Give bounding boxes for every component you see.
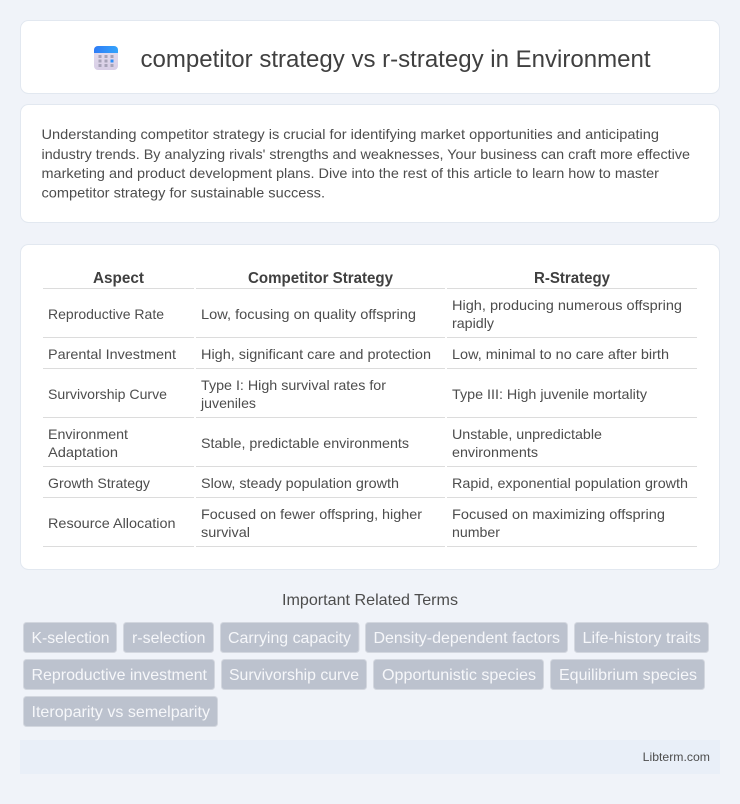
table row: growth strategy: Rapid, exponential population growth (452, 475, 688, 491)
tag: Life-history traits: Life-history traits (582, 630, 701, 647)
table row: environment adaptation: Adaptation (48, 444, 118, 460)
icon: calendar (94, 46, 118, 70)
text block: introduction: marketing and product development plans. Dive into the rest of this article to learn how to master (42, 165, 659, 181)
table row: resource allocation: number (452, 524, 500, 540)
title: competitor strategy vs r-strategy in Environment (140, 46, 651, 73)
panel: related term tags (24, 622, 708, 726)
table row: parental investment (43, 346, 697, 369)
tag: K-selection: K-selection (32, 630, 110, 647)
panel: header (20, 20, 720, 94)
panel: introduction (20, 104, 720, 222)
table row: growth strategy: Growth Strategy (48, 475, 150, 491)
table row: growth strategy (43, 475, 697, 498)
table row: growth strategy: Slow, steady population growth (201, 475, 399, 491)
table row: survivorship curve (43, 377, 697, 418)
table row: resource allocation: survival (201, 524, 250, 540)
table header row (43, 270, 697, 289)
text block: introduction: competitor strategy for sustainable success. (42, 184, 325, 200)
tag: Opportunistic species: Opportunistic species (382, 667, 536, 684)
table row: environment adaptation: Unstable, unpredictable (452, 426, 602, 442)
table row: resource allocation (43, 506, 697, 547)
text block: introduction: industry trends. By analyzing rivals' strengths and weaknesses, Your business can craft more effective (42, 146, 690, 162)
table row: reproductive rate: High, producing numerous offspring (452, 297, 682, 313)
table header row: Competitor Strategy (248, 270, 393, 287)
tag: Reproductive investment (24, 660, 214, 690)
table row: environment adaptation: Stable, predictable environments (201, 435, 409, 451)
table row: reproductive rate: rapidly (452, 315, 494, 331)
tag: Equilibrium species (550, 660, 704, 690)
table row: resource allocation: Resource Allocation (48, 515, 176, 531)
tag: Life-history traits (574, 622, 708, 652)
table header row: R-Strategy (534, 270, 610, 287)
text block: introduction (42, 126, 690, 200)
tag: Survivorship curve (222, 660, 366, 690)
table row: resource allocation: Focused on maximizing offspring (452, 506, 665, 522)
table header row: Aspect (93, 270, 145, 287)
panel: comparison table (20, 244, 720, 570)
footer: Libterm.com (643, 750, 710, 764)
tag: Opportunistic species (374, 660, 544, 690)
tag: K-selection (24, 622, 116, 652)
footer (20, 740, 720, 774)
table row: reproductive rate (43, 297, 697, 338)
table row: survivorship curve: Type III: High juvenile mortality (452, 386, 647, 402)
table row: resource allocation: Focused on fewer offspring, higher (201, 506, 422, 522)
tag: Density-dependent factors (366, 622, 568, 652)
tag: Equilibrium species: Equilibrium species (559, 667, 697, 684)
table row: survivorship curve: Survivorship Curve (48, 386, 167, 402)
tag: Carrying capacity: Carrying capacity (228, 630, 351, 647)
heading: important related terms: Important Related Terms (282, 592, 458, 609)
table row: environment adaptation (43, 426, 697, 467)
table row: parental investment: Parental Investment (48, 346, 176, 362)
tag: Survivorship curve: Survivorship curve (229, 667, 359, 684)
table row: survivorship curve: juveniles (200, 395, 256, 411)
table row: environment adaptation: Environment (48, 426, 128, 442)
tag: Carrying capacity (220, 622, 359, 652)
table row: reproductive rate: Low, focusing on quality offspring (201, 306, 416, 322)
tag: Density-dependent factors: Density-dependent factors (374, 630, 560, 647)
tag: r-selection: r-selection (132, 630, 206, 647)
table row: parental investment: High, significant care and protection (201, 346, 431, 362)
table row: environment adaptation: environments (452, 444, 538, 460)
table row: parental investment: Low, minimal to no care after birth (452, 346, 669, 362)
text block: introduction: Understanding competitor strategy is crucial for identifying market opportunities and anticipating (42, 126, 659, 142)
tag: Iteroparity vs semelparity: Iteroparity vs semelparity (32, 704, 210, 721)
tag: Reproductive investment: Reproductive investment (32, 667, 208, 684)
table row: reproductive rate: Reproductive Rate (48, 306, 164, 322)
tag: Iteroparity vs semelparity (24, 696, 218, 726)
tag: r-selection (124, 622, 214, 652)
table row: survivorship curve: Type I: High survival rates for (201, 377, 386, 393)
